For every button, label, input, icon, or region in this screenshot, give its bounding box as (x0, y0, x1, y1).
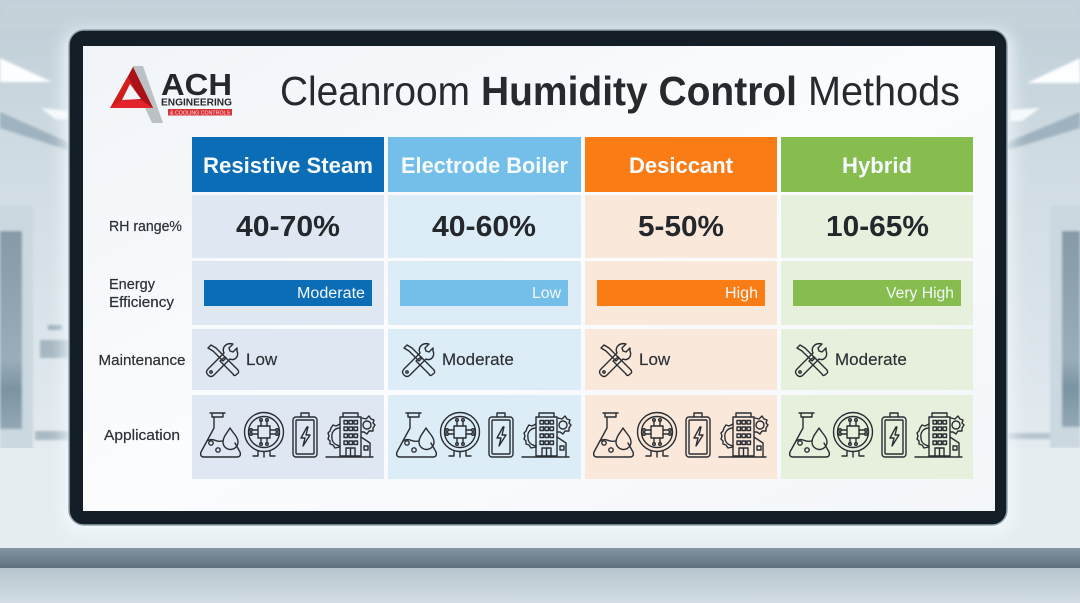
logo: ACH Engineering: & COOLING CONTROLS (170, 110, 230, 116)
header: Hybrid (781, 137, 973, 192)
header: Desiccant (585, 137, 777, 192)
maintenance (796, 344, 907, 376)
efficiency bar: Moderate (297, 285, 365, 302)
maintenance: Low (246, 350, 278, 369)
efficiency bar (597, 280, 765, 306)
header: Hybrid: Hybrid (842, 153, 912, 178)
efficiency bar: High (725, 285, 758, 302)
header: Resistive Steam: Resistive Steam (203, 153, 373, 178)
application icons (594, 412, 768, 457)
logo: ACH Engineering: ACH (161, 68, 232, 102)
cell backgrounds (781, 195, 973, 479)
title: Humidity Control (481, 68, 797, 114)
column: Resistive Steam (192, 137, 384, 479)
RH value: 40-70% (236, 211, 340, 243)
logo: ACH Engineering (110, 66, 232, 123)
maintenance (600, 344, 671, 376)
maintenance (206, 344, 278, 376)
logo: ACH Engineering: ENGINEERING (161, 98, 232, 108)
cell backgrounds (585, 195, 777, 479)
efficiency bar (400, 280, 568, 306)
title: Cleanroom (280, 68, 470, 114)
cell backgrounds (192, 195, 384, 479)
title: Methods (808, 68, 960, 114)
application icons (397, 412, 571, 457)
efficiency bar: Very High (886, 285, 954, 302)
RH value: 10-65% (826, 211, 929, 243)
efficiency bar (793, 280, 961, 306)
maintenance: Low (639, 350, 671, 369)
row labels (98, 218, 186, 444)
header: Resistive Steam (192, 137, 384, 192)
row labels: Energy (109, 276, 155, 293)
maintenance: Moderate (442, 350, 514, 369)
application icons (790, 412, 964, 457)
row labels: Maintenance (98, 352, 186, 369)
column: Desiccant (585, 137, 777, 479)
title (280, 68, 960, 114)
column: Electrode Boiler (388, 137, 581, 479)
efficiency bar: Low (532, 285, 562, 302)
application icons (201, 412, 375, 457)
header: Electrode Boiler: Electrode Boiler (401, 153, 568, 178)
RH value: 40-60% (432, 211, 536, 243)
row labels: Efficiency (109, 294, 175, 311)
row labels: RH range% (109, 218, 182, 235)
RH value: 5-50% (638, 211, 724, 243)
maintenance (402, 344, 514, 376)
cell backgrounds (388, 195, 581, 479)
maintenance: Moderate (835, 350, 907, 369)
header: Electrode Boiler (388, 137, 581, 192)
efficiency bar (204, 280, 372, 306)
row labels: Application (104, 427, 180, 444)
display monitor frame (62, 30, 1014, 535)
column: Hybrid (781, 137, 973, 479)
header: Desiccant: Desiccant (629, 153, 733, 178)
